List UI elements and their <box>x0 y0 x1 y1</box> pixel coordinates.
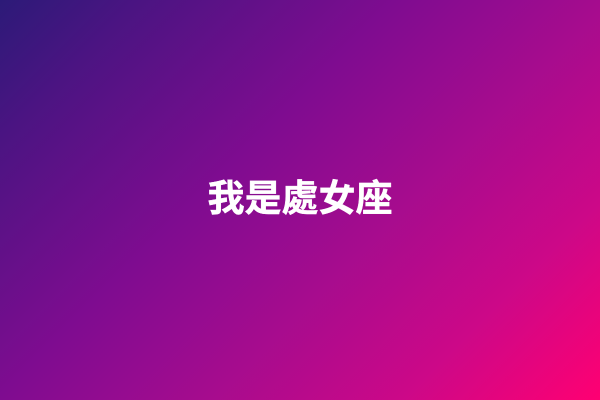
title: 我是處女座 <box>208 178 392 219</box>
